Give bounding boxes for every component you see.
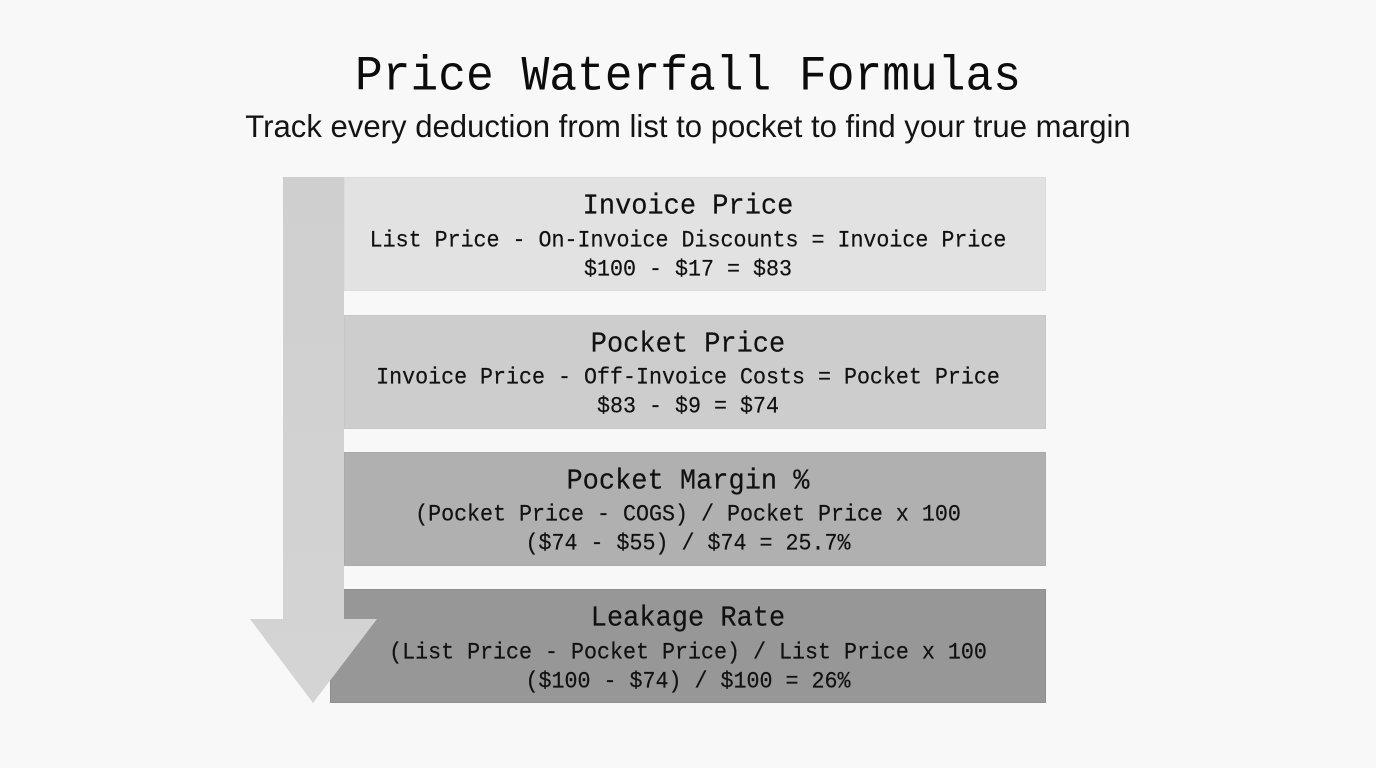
panel: pocket price <box>344 315 1046 429</box>
example: pocket price: $83 - $9 = $74 <box>597 393 779 420</box>
example: invoice price: $100 - $17 = $83 <box>584 256 792 283</box>
title: Price Waterfall Formulas <box>355 48 1021 105</box>
formula: invoice price: List Price - On-Invoice Discounts = Invoice Price <box>370 227 1006 254</box>
panel: pocket margin <box>344 452 1046 566</box>
formula: pocket price: Invoice Price - Off-Invoice Costs = Pocket Price <box>376 364 1000 391</box>
subtitle: Track every deduction from list to pocket to find your true margin <box>245 109 1131 144</box>
heading: pocket margin: Pocket Margin % <box>566 466 810 498</box>
panel: leakage rate <box>330 589 1046 703</box>
example: pocket margin: ($74 - $55) / $74 = 25.7% <box>526 530 850 557</box>
formula: pocket margin: (Pocket Price - COGS) / Pocket Price x 100 <box>415 501 961 528</box>
heading: pocket price: Pocket Price <box>591 329 785 361</box>
formula: leakage rate: (List Price - Pocket Price) / List Price x 100 <box>389 639 987 666</box>
panel: invoice price <box>344 177 1046 291</box>
example: leakage rate: ($100 - $74) / $100 = 26% <box>526 668 850 695</box>
heading: invoice price: Invoice Price <box>583 191 793 223</box>
heading: leakage rate: Leakage Rate <box>591 603 785 635</box>
